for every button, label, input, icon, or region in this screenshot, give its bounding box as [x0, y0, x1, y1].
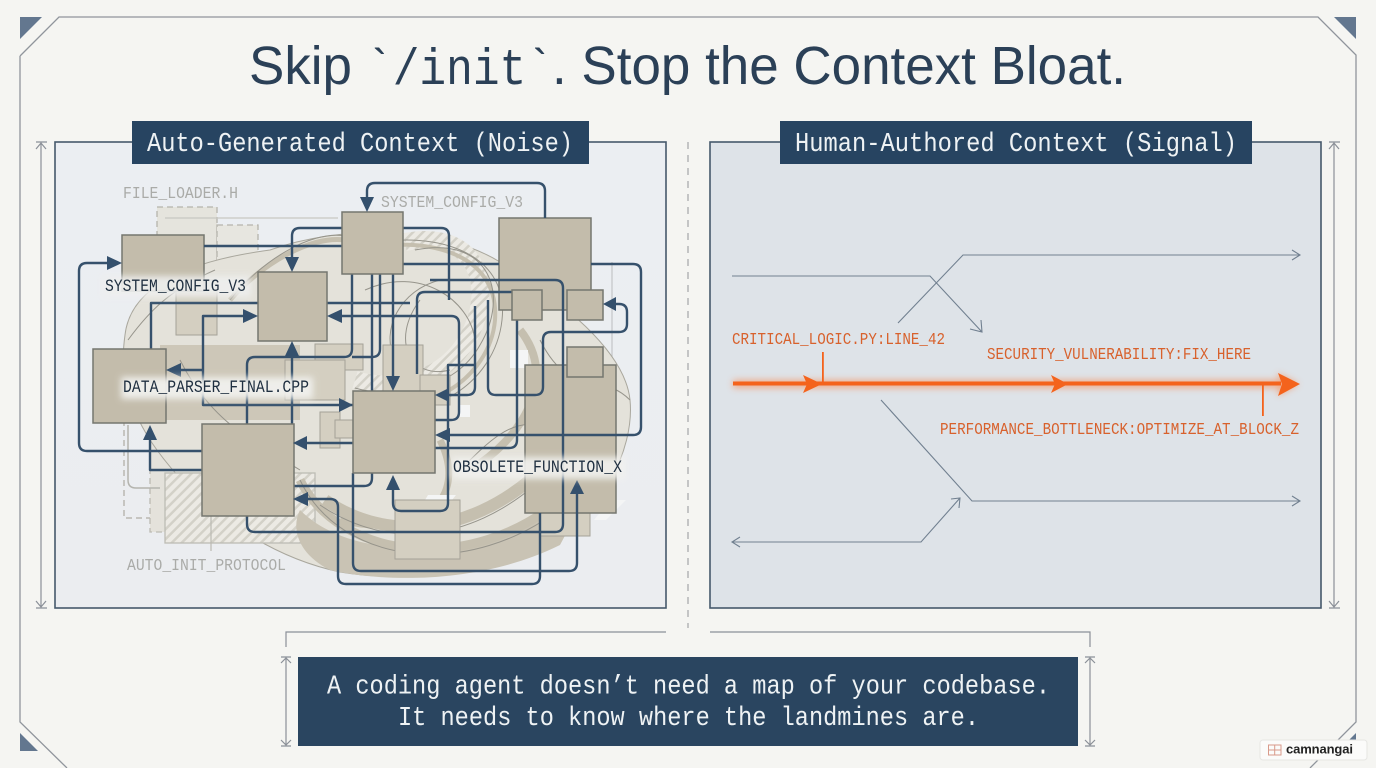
- bottom right dimension arrow: [1085, 657, 1095, 746]
- solid blocks: [122, 218, 616, 513]
- bottom bracket: [286, 632, 1090, 647]
- panel: human-authored context: [710, 142, 1321, 608]
- central blocks: [93, 212, 603, 516]
- bottom left dimension arrow: [281, 657, 291, 746]
- conclusion banner: It needs to know where the landmines are.: [398, 704, 979, 734]
- thin path: upper right: [898, 250, 1300, 323]
- center dashed divider: [687, 142, 689, 628]
- watermark badge: [1260, 740, 1367, 760]
- faded label: system config top: SYSTEM_CONFIG_V3: [381, 194, 523, 213]
- signal line glow: [733, 373, 1299, 396]
- heading: noise: Auto-Generated Context (Noise): [147, 130, 573, 160]
- left height dimension arrow: [36, 142, 47, 608]
- thin path: upper left to diagonal: [732, 276, 982, 332]
- background blocks: [176, 280, 590, 559]
- heading: noise: [132, 121, 589, 164]
- ghost layers: [124, 207, 612, 532]
- arrowheads: [107, 197, 616, 506]
- title: `/init`: [366, 43, 553, 100]
- label: performance bottleneck: PERFORMANCE_BOTTLENECK:OPTIMIZE_AT_BLOCK_Z: [940, 421, 1299, 440]
- faded label: auto init protocol: AUTO_INIT_PROTOCOL: [127, 557, 286, 576]
- glowing label: system config: SYSTEM_CONFIG_V3: [105, 277, 246, 297]
- watermark badge: camnangai: [1286, 742, 1353, 756]
- icon: book: [1268, 745, 1281, 755]
- tangled diagram: [79, 183, 641, 584]
- title: [249, 36, 1126, 100]
- title: . Stop the Context Bloat.: [552, 36, 1126, 96]
- faded label: file loader: FILE_LOADER.H: [123, 185, 238, 204]
- conclusion banner: [298, 657, 1078, 746]
- glowing label: obsolete function: OBSOLETE_FUNCTION_X: [453, 458, 622, 478]
- right height dimension arrow: [1329, 142, 1340, 608]
- thin path: lower left: [732, 498, 960, 547]
- heading: signal: Human-Authored Context (Signal): [795, 130, 1237, 160]
- label: critical logic: CRITICAL_LOGIC.PY:LINE_42: [732, 331, 945, 350]
- panel background: [55, 142, 666, 608]
- title: Skip: [249, 36, 352, 96]
- connector wires: [79, 183, 641, 584]
- glowing label: data parser: DATA_PARSER_FINAL.CPP: [123, 378, 309, 398]
- heading: signal: [780, 121, 1252, 164]
- label: security vulnerability: SECURITY_VULNERABILITY:FIX_HERE: [987, 346, 1251, 365]
- organic blob: [123, 233, 630, 578]
- orange signal line: [733, 352, 1300, 416]
- panel background: [710, 142, 1321, 608]
- thin path: lower right: [881, 400, 1300, 506]
- panel: auto-generated context: [55, 142, 666, 608]
- conclusion banner: A coding agent doesn’t need a map of your codebase.: [327, 672, 1050, 702]
